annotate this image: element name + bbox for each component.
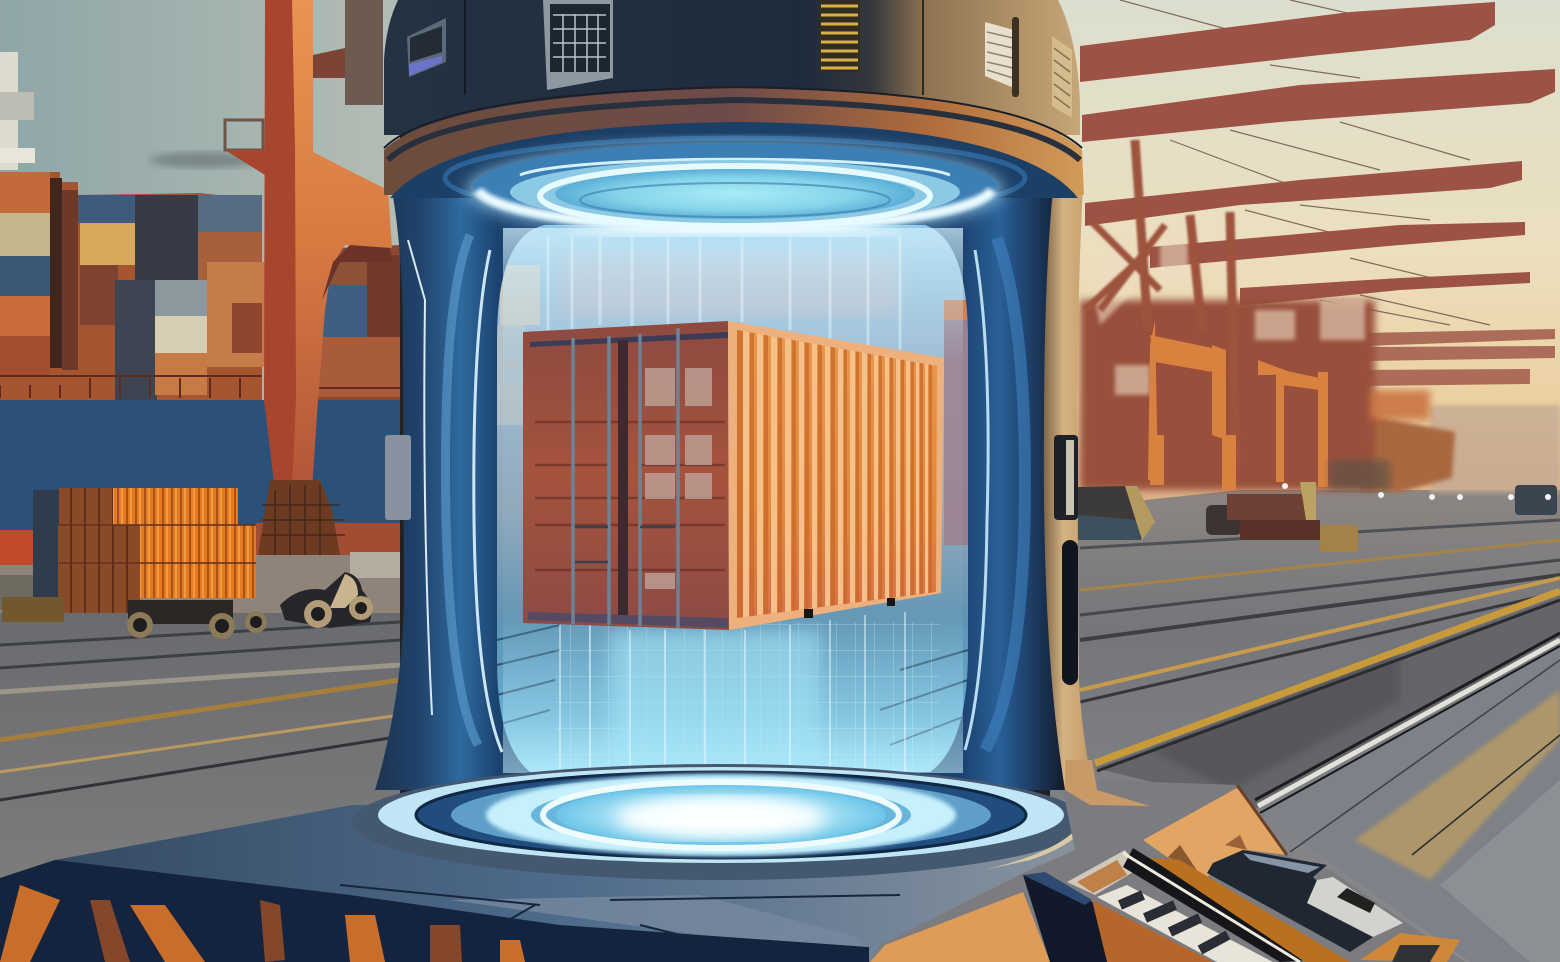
ship hull — [0, 400, 400, 565]
small purple panel — [407, 18, 446, 77]
right gantry cranes — [1080, 0, 1560, 493]
left ground vehicles — [2, 572, 373, 639]
white louvre — [985, 17, 1019, 97]
left container stacks — [0, 172, 400, 400]
white ship tower at far left — [0, 52, 35, 170]
copper collar ring — [384, 87, 1084, 198]
top dome housing — [384, 0, 1080, 135]
shipping container — [523, 320, 944, 630]
base platform — [0, 800, 1150, 962]
top glowing emitter ring — [445, 138, 1025, 237]
chamber body frame — [375, 180, 1094, 790]
orange control console — [870, 760, 1465, 962]
container front doors — [523, 321, 729, 630]
chamber glass interior — [495, 225, 970, 792]
right ground vehicles — [1078, 482, 1557, 552]
bottom glowing emitter ring — [352, 764, 1088, 880]
container corrugated side — [728, 320, 944, 630]
orange container stack foreground — [0, 488, 400, 613]
hologram light columns — [503, 228, 963, 795]
left red crane tower — [225, 0, 392, 555]
sky background — [0, 0, 1560, 510]
grille vent — [543, 0, 613, 90]
amber vent — [819, 0, 860, 72]
side louvre — [1052, 36, 1072, 118]
ground with rail tracks — [0, 490, 1560, 962]
